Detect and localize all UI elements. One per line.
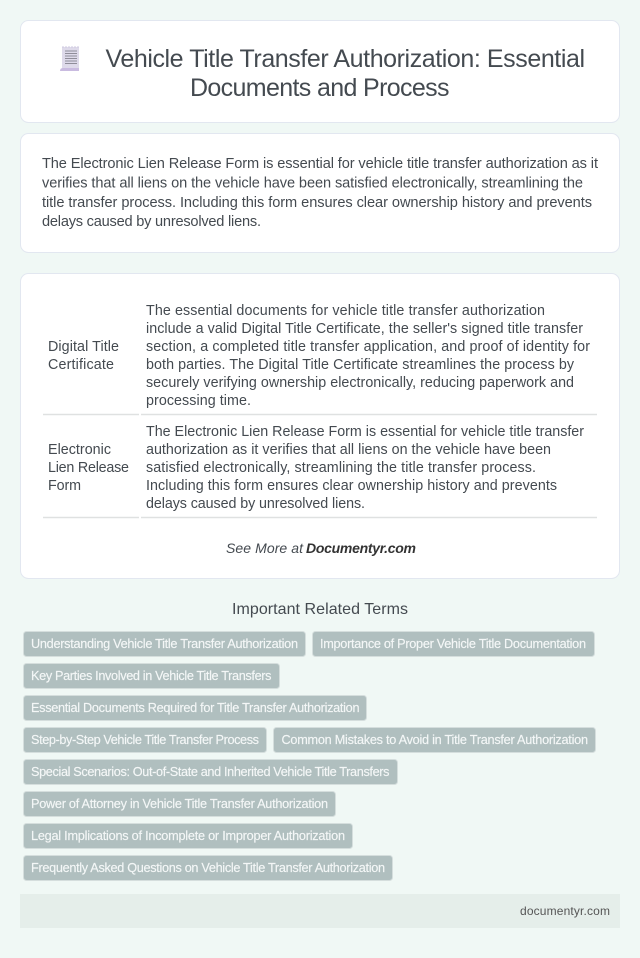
see more link [226,540,416,556]
heading: Documents and Process [190,74,450,102]
row label: Digital Title [48,339,119,355]
row description: securely verifying ownership electronically, reducing paperwork and [146,375,574,391]
icon: document scroll [60,47,79,71]
tag [24,664,280,688]
tag: Understanding Vehicle Title Transfer Authorization [31,637,298,651]
tag [24,696,366,720]
tag: Essential Documents Required for Title Transfer Authorization [31,701,360,715]
related term tags [24,632,596,880]
tag: Power of Attorney in Vehicle Title Transfer Authorization [31,797,328,811]
row description [146,303,590,409]
row description: Including this form ensures clear ownership history and prevents [146,478,557,494]
row: digital title certificate [48,303,590,409]
row description: section, a completed title transfer application, and proof of identity for [146,339,590,355]
row description: delays caused by unresolved liens. [146,496,365,512]
tag [24,728,266,752]
heading: related terms: Important Related Terms [232,601,408,618]
intro text: The Electronic Lien Release Form is essential for vehicle title transfer authorization as it [42,156,598,172]
row label: Electronic [48,442,111,458]
row label: Form [48,478,81,494]
tag [24,824,352,848]
tag: Importance of Proper Vehicle Title Documentation [320,637,586,651]
row label [48,339,119,373]
tag: Step-by-Step Vehicle Title Transfer Process [31,733,259,747]
tag: Special Scenarios: Out-of-State and Inherited Vehicle Title Transfers [31,765,390,779]
tag [24,760,398,784]
footer: documentyr.com [520,904,610,918]
tag: Frequently Asked Questions on Vehicle Title Transfer Authorization [31,861,385,875]
tag: Legal Implications of Incomplete or Improper Authorization [31,829,345,843]
panel: title card [20,20,620,122]
tag [24,632,306,656]
panel: documents table [20,274,620,578]
row description [146,424,584,512]
intro text [42,156,598,230]
tag: Common Mistakes to Avoid in Title Transfer Authorization [282,733,588,747]
row description: both parties. The Digital Title Certificate streamlines the process by [146,357,575,373]
intro text: verifies that all liens on the vehicle have been satisfied electronically, streamlining the [42,176,583,192]
see more link: Documentyr.com [306,540,416,556]
row description: processing time. [146,393,251,409]
panel: introduction [20,134,620,252]
row label: Certificate [48,357,114,373]
intro text: delays caused by unresolved liens. [42,214,261,230]
row label [48,442,129,494]
footer [20,894,620,928]
tag [274,728,596,752]
tag [312,632,594,656]
row label: Lien Release [48,460,129,476]
tag [24,792,336,816]
row: electronic lien release form [48,424,584,512]
row description: satisfied electronically, streamlining the title transfer process. [146,460,536,476]
heading: Vehicle Title Transfer Authorization: Essential [106,45,585,73]
intro text: title transfer process. Including this form ensures clear ownership history and prevents [42,195,592,211]
heading [106,45,585,102]
row description: include a valid Digital Title Certificate, the seller's signed title transfer [146,321,583,337]
row description: authorization as it verifies that all liens on the vehicle have been [146,442,551,458]
see more link: See More at [226,540,304,556]
row description: The Electronic Lien Release Form is essential for vehicle title transfer [146,424,584,440]
row description: The essential documents for vehicle title transfer authorization [146,303,545,319]
tag: Key Parties Involved in Vehicle Title Transfers [31,669,272,683]
tag [24,856,392,880]
